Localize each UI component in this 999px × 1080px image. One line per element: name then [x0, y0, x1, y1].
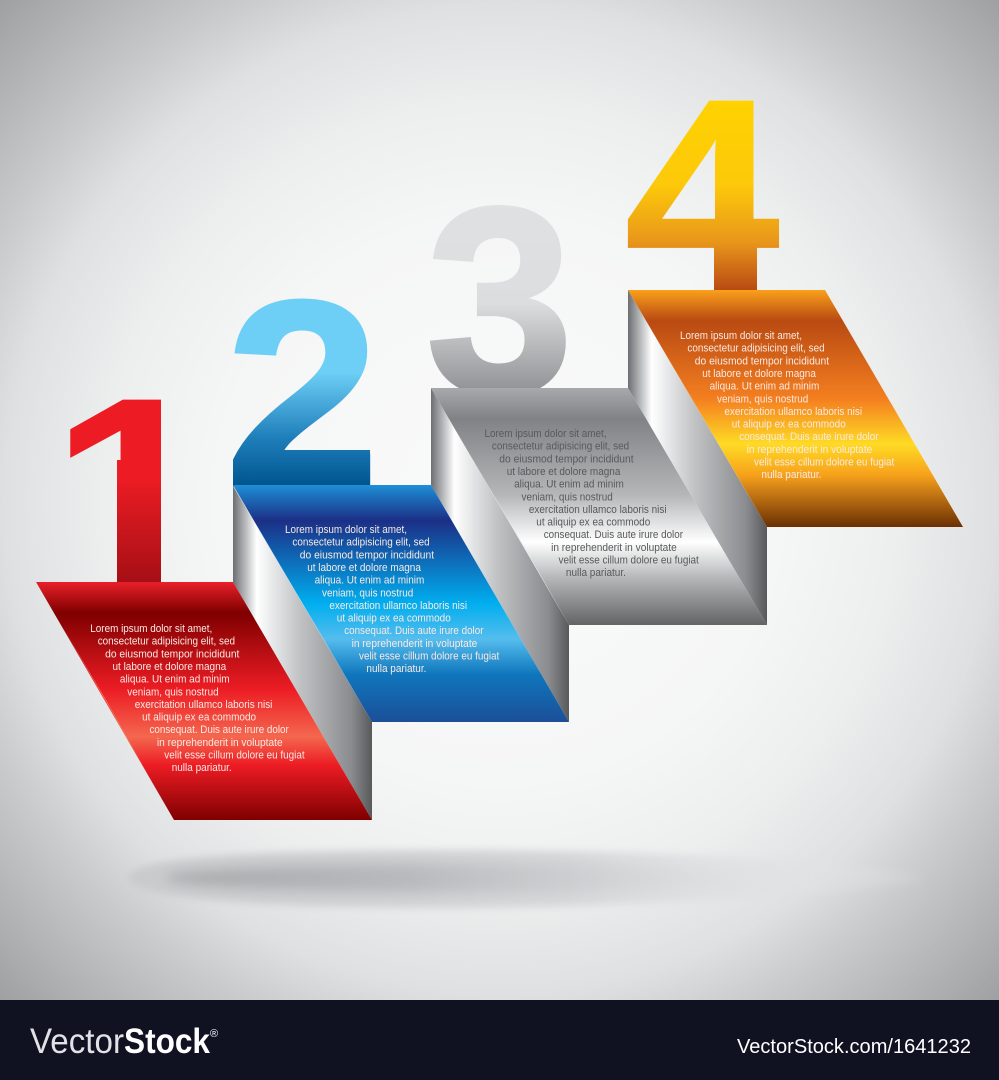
step 4 text: in reprehenderit in voluptate	[747, 444, 872, 456]
numeral 1 stem	[117, 460, 161, 583]
registered mark: ®	[210, 1028, 218, 1040]
step 1 text: ut labore et dolore magna	[113, 661, 226, 673]
step 1 text: Lorem ipsum dolor sit amet,	[90, 623, 212, 635]
step 1 text: aliqua. Ut enim ad minim	[120, 674, 230, 686]
step 3 text: ut aliquip ex ea commodo	[536, 517, 650, 529]
step 3 text: nulla pariatur.	[566, 567, 626, 579]
step 4 text: consequat. Duis aute irure dolor	[739, 431, 879, 443]
step 2 text: aliqua. Ut enim ad minim	[315, 575, 424, 587]
step 1 text: consequat. Duis aute irure dolor	[150, 724, 289, 736]
panel: step 2 blue	[233, 485, 569, 722]
floor shadow	[128, 850, 925, 908]
step 3 text: do eiusmod tempor incididunt	[499, 453, 634, 465]
step 2 text: exercitation ullamco laboris nisi	[329, 600, 467, 612]
step 1 text: do eiusmod tempor incididunt	[105, 648, 239, 660]
step 1 text: exercitation ullamco laboris nisi	[135, 699, 272, 711]
step 1 text: ut aliquip ex ea commodo	[142, 712, 256, 724]
step 3 to 4 silver riser	[628, 290, 767, 625]
blue face	[233, 485, 569, 722]
step 1 text: in reprehenderit in voluptate	[157, 737, 283, 749]
orange face	[628, 290, 963, 527]
step 3 text: exercitation ullamco laboris nisi	[529, 504, 667, 516]
step 2 text: velit esse cillum dolore eu fugiat	[359, 650, 499, 662]
step 2 text: ut labore et dolore magna	[307, 562, 421, 574]
step 3 text: ut labore et dolore magna	[507, 466, 620, 478]
numeral 2 glyph: 2	[225, 245, 380, 542]
numeral 2	[225, 245, 380, 542]
step 3 text: consequat. Duis aute irure dolor	[544, 529, 683, 541]
orange edge highlight	[644, 318, 767, 527]
step 4 text: nulla pariatur.	[761, 469, 821, 481]
numeral 3: 3	[426, 153, 573, 449]
step 2 text: in reprehenderit in voluptate	[352, 638, 477, 650]
step 4 text	[680, 330, 894, 481]
step 2 to 3 silver riser	[431, 388, 569, 722]
step 3 text: veniam, quis nostrud	[522, 491, 613, 503]
step 4 text: Lorem ipsum dolor sit amet,	[680, 330, 802, 342]
step 2 text: do eiusmod tempor incididunt	[300, 549, 434, 561]
step 4 text: do eiusmod tempor incididunt	[695, 355, 829, 367]
banner background	[0, 1000, 999, 1080]
step 2 text: Lorem ipsum dolor sit amet,	[285, 524, 407, 536]
step 3 text: in reprehenderit in voluptate	[551, 542, 677, 554]
step 4 text: velit esse cillum dolore eu fugiat	[754, 456, 894, 468]
grey face	[431, 388, 767, 625]
step 1 text	[90, 623, 305, 774]
red edge highlight	[62, 626, 150, 778]
step 1 text: consectetur adipisicing elit, sed	[98, 636, 235, 648]
step 3 text: Lorem ipsum dolor sit amet,	[484, 428, 606, 440]
panel: step 1 red	[36, 582, 372, 820]
brand logo: Vector	[30, 1022, 124, 1061]
step 3 text: consectetur adipisicing elit, sed	[492, 441, 629, 453]
step 2 text: nulla pariatur.	[366, 663, 426, 675]
step 2 text: ut aliquip ex ea commodo	[337, 613, 451, 625]
step 4 text: ut aliquip ex ea commodo	[732, 419, 846, 431]
grey edge highlight	[447, 416, 569, 625]
step 2 text: veniam, quis nostrud	[322, 587, 413, 599]
blue edge highlight	[249, 513, 372, 722]
step 3 text: aliqua. Ut enim ad minim	[514, 479, 624, 491]
numeral 2 base	[233, 450, 370, 486]
step 4 text: ut labore et dolore magna	[702, 368, 816, 380]
step 4 text: consectetur adipisicing elit, sed	[687, 343, 825, 355]
step 3 text: velit esse cillum dolore eu fugiat	[558, 554, 699, 566]
step 2 text	[285, 524, 499, 675]
numeral 1 glyph: 1	[49, 342, 219, 639]
numeral 4 glyph: 4	[625, 44, 781, 341]
step 1 text: nulla pariatur.	[172, 762, 232, 774]
step 3 text	[484, 428, 699, 579]
shadow core	[165, 863, 775, 893]
footer banner	[0, 1000, 999, 1080]
numeral 4 stem foot	[714, 240, 757, 291]
step 4 text: exercitation ullamco laboris nisi	[724, 406, 862, 418]
image reference: VectorStock.com/1641232	[737, 1035, 971, 1058]
brand logo bold part: Stock	[124, 1022, 210, 1061]
panel: step 4 orange	[628, 290, 963, 527]
step 4 text: aliqua. Ut enim ad minim	[710, 381, 819, 393]
numeral 4	[628, 100, 780, 290]
step 2 text: consequat. Duis aute irure dolor	[344, 625, 484, 637]
red face	[36, 582, 372, 820]
panel: step 3 grey	[431, 388, 767, 625]
numeral 1	[70, 400, 161, 582]
shadow outer haze	[128, 850, 925, 908]
step 4 text: veniam, quis nostrud	[717, 393, 808, 405]
step 1 to 2 silver riser	[233, 486, 372, 820]
step 2 text: consectetur adipisicing elit, sed	[292, 537, 430, 549]
step 1 text: veniam, quis nostrud	[127, 686, 219, 698]
step 1 text: velit esse cillum dolore eu fugiat	[164, 750, 305, 762]
